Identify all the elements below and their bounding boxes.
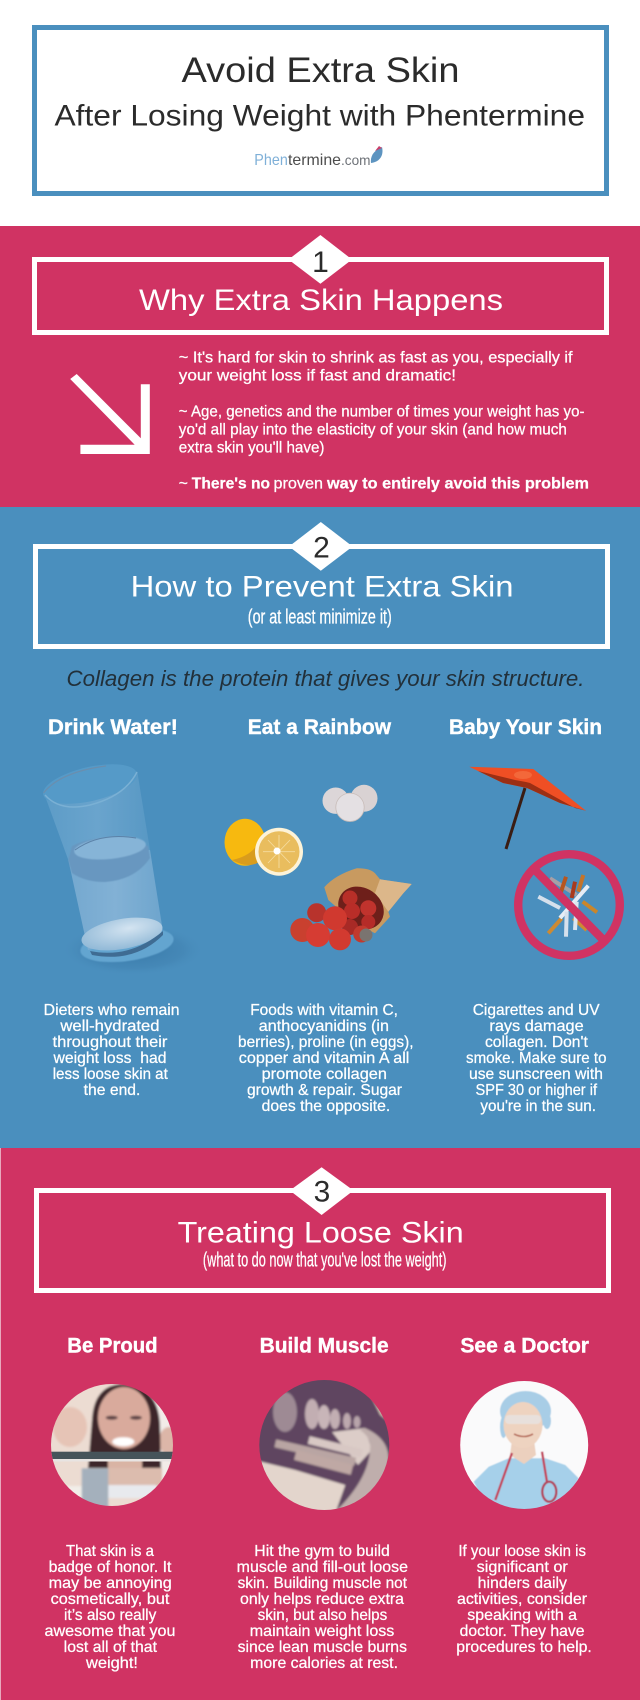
text block: build muscle: more calories at rest.	[250, 1655, 398, 1672]
column heading: be proud: Be Proud	[67, 1334, 158, 1358]
photo: dumbbells	[256, 1377, 393, 1514]
subheading: (or at least minimize it)	[248, 606, 392, 628]
text block: be proud: badge of honor. It	[49, 1559, 172, 1576]
heading box	[36, 546, 608, 646]
number diamond 2	[289, 522, 353, 571]
text block: causes: extra skin you'll have)	[179, 440, 324, 457]
text block: see a doctor: activities, consider	[457, 1591, 587, 1608]
text block: be proud: That skin is a	[66, 1543, 154, 1560]
text block: drink water	[44, 1002, 180, 1099]
photo: woman smiling over scale	[51, 1384, 173, 1506]
text block: drink water: throughout their	[53, 1034, 167, 1051]
text block: eat a rainbow: anthocyanidins (in	[259, 1018, 389, 1035]
text block: build muscle: muscle and fill-out loose	[237, 1559, 408, 1576]
text block: eat a rainbow: promote collagen	[262, 1066, 387, 1083]
text block: eat a rainbow: copper and vitamin A all	[239, 1050, 409, 1067]
text block: drink water: weight loss had	[52, 1050, 167, 1067]
text block: eat a rainbow: growth & repair. Sugar	[247, 1082, 402, 1099]
subheading: (what to do now that you've lost the weight)	[203, 1250, 446, 1272]
logo: Phentermine.com: Phen	[254, 152, 288, 169]
logo: Phentermine.com	[254, 146, 383, 169]
text block: causes	[179, 349, 589, 493]
text block: causes: There's no	[192, 476, 270, 493]
heading box	[34, 260, 606, 332]
icon: eggs	[322, 785, 378, 822]
text block: causes: proven	[274, 476, 323, 493]
icon: arrow pointing down right	[70, 374, 150, 454]
text block: baby your skin: SPF 30 or higher if	[476, 1082, 598, 1099]
column heading: eat a rainbow: Eat a Rainbow	[248, 715, 391, 739]
text block: be proud: lost all of that	[64, 1639, 158, 1656]
text block: drink water: Dieters who remain	[44, 1002, 180, 1019]
text block: baby your skin: rays damage	[489, 1018, 584, 1035]
text block: drink water: the end.	[84, 1082, 140, 1099]
text block: see a doctor: hinders daily	[478, 1575, 567, 1592]
column heading: baby your skin: Baby Your Skin	[449, 715, 602, 739]
text block: be proud: weight!	[85, 1655, 138, 1672]
column heading: build muscle: Build Muscle	[260, 1334, 389, 1358]
text block: causes: yo'd all play into the elasticity of your skin (and how much	[179, 422, 567, 439]
collagen statement: Collagen is the protein that gives your skin structure.	[66, 666, 584, 691]
column heading: see a doctor: See a Doctor	[460, 1334, 590, 1358]
title panel	[34, 28, 606, 194]
text block: drink water: less loose skin at	[53, 1066, 168, 1083]
logo: Phentermine.com: termine	[288, 152, 341, 169]
text block: build muscle: skin, but also helps	[258, 1607, 387, 1624]
number diamond 3: 3	[314, 1176, 330, 1209]
text block: eat a rainbow: Foods with vitamin C,	[250, 1002, 398, 1019]
text block: eat a rainbow: does the opposite.	[262, 1098, 390, 1115]
text block: eat a rainbow: berries), proline (in eggs),	[238, 1034, 414, 1051]
icon: no smoking sign	[518, 854, 620, 956]
title: Avoid Extra Skin	[182, 50, 460, 90]
column heading: drink water: Drink Water!	[48, 715, 178, 739]
subtitle: After Losing Weight with Phentermine	[54, 100, 585, 132]
text block: see a doctor: procedures to help.	[456, 1639, 592, 1656]
text block: build muscle: skin. Building muscle not	[238, 1575, 408, 1592]
panel: how to prevent extra skin	[0, 507, 640, 1148]
text block: be proud: cosmetically, but	[51, 1591, 170, 1608]
heading: Treating Loose Skin	[178, 1217, 464, 1250]
text block: causes: way to entirely avoid this problem	[326, 476, 589, 493]
number diamond 2: 2	[313, 531, 330, 564]
text block: baby your skin	[466, 1002, 607, 1115]
text block: causes: ~ Age, genetics and the number of times your weight has yo-	[179, 404, 585, 421]
panel: why extra skin happens	[0, 226, 640, 507]
text block: see a doctor	[456, 1543, 592, 1656]
icon: glass of water	[39, 757, 205, 976]
text block: build muscle	[237, 1543, 408, 1672]
text block: see a doctor: significant or	[477, 1559, 568, 1576]
number diamond 3	[290, 1167, 354, 1215]
icon: red umbrella	[469, 767, 586, 849]
text block: causes: ~	[179, 476, 188, 493]
text block: baby your skin: Cigarettes and UV	[473, 1002, 600, 1019]
text block: build muscle: only helps reduce extra	[240, 1591, 404, 1608]
text block: causes: your weight loss if fast and dramatic!	[179, 367, 456, 384]
number diamond 1: 1	[312, 246, 329, 279]
icon: strawberries in paper bag	[290, 868, 412, 950]
text block: drink water: well-hydrated	[59, 1018, 160, 1035]
text block: baby your skin: collagen. Don't	[485, 1034, 588, 1051]
text block: eat a rainbow	[238, 1002, 414, 1115]
heading: Why Extra Skin Happens	[139, 284, 503, 317]
text block: build muscle: Hit the gym to build	[254, 1543, 390, 1560]
text block: build muscle: since lean muscle burns	[238, 1639, 407, 1656]
heading box	[36, 1190, 608, 1290]
text block: be proud: awesome that you	[44, 1623, 176, 1640]
text block: see a doctor: If your loose skin is	[458, 1543, 586, 1560]
logo: Phentermine.com: .com	[341, 152, 370, 168]
panel: treating loose skin	[0, 1148, 640, 1700]
icon: lemon	[224, 819, 303, 876]
text block: see a doctor: speaking with a	[467, 1607, 577, 1624]
text block: be proud	[44, 1543, 176, 1672]
number diamond 1	[288, 235, 352, 284]
heading: How to Prevent Extra Skin	[131, 571, 514, 604]
text block: baby your skin: smoke. Make sure to	[466, 1050, 607, 1067]
text block: be proud: it’s also really	[64, 1607, 156, 1624]
text block: causes: ~ It's hard for skin to shrink as fast as you, especially if	[179, 349, 573, 366]
text block: be proud: may be annoying	[49, 1575, 172, 1592]
text block: baby your skin: you're in the sun.	[480, 1098, 596, 1115]
text block: see a doctor: doctor. They have	[460, 1623, 584, 1640]
text block: build muscle: maintain weight loss	[250, 1623, 394, 1640]
photo: doctor	[457, 1378, 591, 1512]
text block: baby your skin: use sunscreen with	[469, 1066, 603, 1083]
